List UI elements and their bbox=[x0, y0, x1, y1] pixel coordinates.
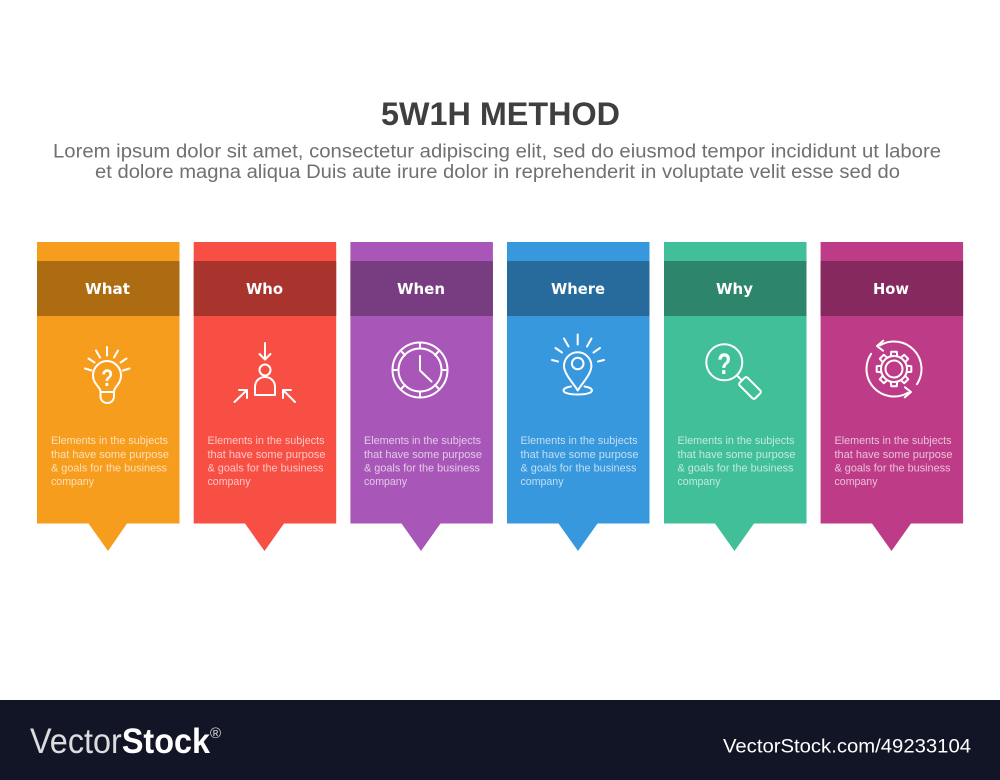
panel: What bbox=[37, 242, 180, 551]
Who heading: Who bbox=[246, 280, 283, 298]
What description bbox=[51, 435, 169, 488]
Where header band bbox=[507, 261, 650, 316]
Who description: Elements in the subjects bbox=[208, 435, 325, 447]
How heading: How bbox=[873, 280, 909, 298]
subtitle text: Lorem ipsum dolor sit amet, consectetur adipiscing elit, sed do eiusmod tempor incididunt ut labore bbox=[53, 142, 941, 162]
icon: location pin with rays bbox=[552, 334, 604, 394]
Who description: company bbox=[208, 476, 251, 488]
Where card background bbox=[507, 242, 650, 551]
How header band bbox=[821, 261, 963, 316]
Who card background bbox=[194, 242, 336, 551]
What description: company bbox=[51, 476, 94, 488]
What card background bbox=[37, 242, 180, 551]
Why description bbox=[678, 435, 796, 488]
icon: gear with cycle arrows bbox=[866, 341, 922, 397]
Who description bbox=[208, 435, 326, 488]
icon: light bulb with question mark bbox=[85, 347, 130, 403]
panel: Who bbox=[194, 242, 336, 551]
Why header band bbox=[664, 261, 806, 316]
How description: Elements in the subjects bbox=[834, 435, 952, 447]
Why description: & goals for the business bbox=[678, 462, 794, 474]
registered mark: ® bbox=[210, 725, 221, 742]
When heading: When bbox=[397, 280, 445, 298]
subtitle text: et dolore magna aliqua Duis aute irure dolor in reprehenderit in voluptate velit esse sed do bbox=[95, 162, 900, 183]
Why heading: Why bbox=[716, 280, 753, 298]
Why description: company bbox=[678, 476, 721, 488]
When description: that have some purpose bbox=[364, 449, 482, 461]
When description bbox=[364, 435, 482, 488]
Why description: Elements in the subjects bbox=[678, 435, 795, 447]
Why card background bbox=[664, 242, 806, 551]
subtitle text bbox=[53, 142, 941, 183]
How description: that have some purpose bbox=[834, 449, 952, 461]
panel: How bbox=[821, 242, 963, 551]
icon: person with converging arrows bbox=[234, 343, 295, 402]
Where description: that have some purpose bbox=[520, 449, 638, 461]
panel: When bbox=[350, 242, 493, 551]
Where description: & goals for the business bbox=[520, 462, 637, 474]
icon: light bulb with question mark: ? bbox=[101, 365, 113, 392]
What description: & goals for the business bbox=[51, 462, 167, 474]
image id: VectorStock.com/49233104 bbox=[723, 736, 971, 758]
Who description: & goals for the business bbox=[208, 462, 324, 474]
Why description: that have some purpose bbox=[678, 449, 796, 461]
What description: Elements in the subjects bbox=[51, 435, 168, 447]
What header band bbox=[37, 261, 180, 316]
When header band bbox=[350, 261, 493, 316]
Where description: Elements in the subjects bbox=[520, 435, 638, 447]
What heading: What bbox=[85, 280, 130, 298]
Where heading: Where bbox=[551, 280, 605, 298]
When description: Elements in the subjects bbox=[364, 435, 481, 447]
How description bbox=[834, 435, 952, 488]
When description: & goals for the business bbox=[364, 462, 480, 474]
How description: company bbox=[834, 476, 878, 488]
icon: magnifier with question mark: ? bbox=[717, 348, 731, 381]
panel: Where bbox=[507, 242, 650, 551]
When description: company bbox=[364, 476, 407, 488]
icon: clock bbox=[392, 342, 448, 398]
panel: Why bbox=[664, 242, 806, 551]
footer bar bbox=[0, 700, 1000, 780]
icon: magnifier with question mark bbox=[706, 344, 762, 400]
Where description: company bbox=[520, 476, 564, 488]
Who description: that have some purpose bbox=[208, 449, 326, 461]
When card background bbox=[350, 242, 493, 551]
Where description bbox=[520, 435, 638, 488]
Who header band bbox=[194, 261, 336, 316]
How card background bbox=[821, 242, 963, 551]
What description: that have some purpose bbox=[51, 449, 169, 461]
title: 5W1H METHOD bbox=[381, 96, 620, 132]
VectorStock logo: VectorStock bbox=[30, 722, 210, 761]
How description: & goals for the business bbox=[834, 462, 951, 474]
